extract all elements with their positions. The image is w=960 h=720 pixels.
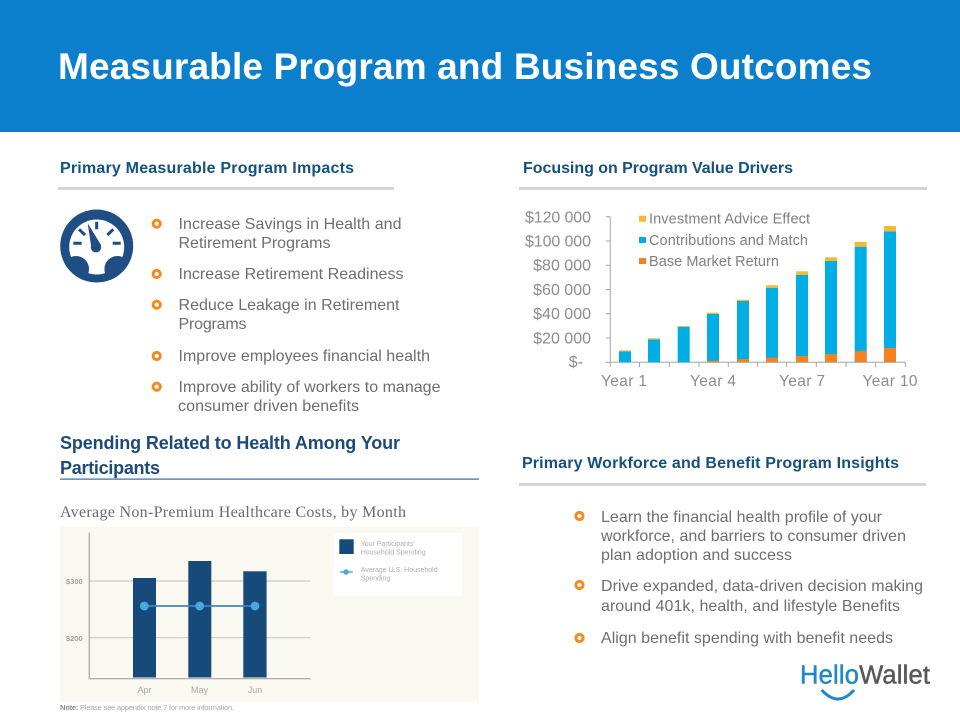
stacked bar chart: $20 000 [533, 330, 591, 348]
chart legend [639, 212, 810, 270]
legend: spending [334, 533, 462, 596]
panel: spending related to health [60, 433, 479, 712]
bullet list: program impacts: consumer driven benefits [178, 398, 359, 415]
chart: healthcare costs by month: $300 [66, 577, 83, 586]
panel: spending related to health: Participants [60, 458, 160, 478]
bullet list: program impacts: Increase Savings in Health and [178, 216, 402, 233]
chart: healthcare costs by month: $200 [66, 634, 83, 643]
bullet list: program impacts [153, 216, 441, 415]
bars: investment advice effect [619, 226, 896, 351]
stacked bar chart: Year 7 [779, 373, 825, 390]
bullet list: workforce insights: Drive expanded, data-driven decision making [601, 578, 923, 595]
bars: household spending [133, 561, 267, 678]
stacked bar chart: Year 1 [601, 373, 647, 390]
title: Measurable Program and Business Outcomes [58, 46, 872, 87]
bullet list: workforce insights: plan adoption and success [601, 547, 792, 564]
stacked bar chart [525, 210, 918, 390]
panel: primary measurable program impacts [58, 160, 441, 415]
line: average US spending [140, 602, 259, 610]
legend: spending: Average U.S. Household [361, 567, 438, 574]
bullet list: program impacts: Programs [178, 316, 246, 333]
header banner [0, 0, 960, 132]
icon: gauge [60, 210, 133, 282]
bullet list: program impacts: Reduce Leakage in Retirement [178, 297, 400, 314]
bullet list: program impacts: Improve ability of workers to manage [178, 379, 441, 396]
stacked bar chart: $60 000 [533, 282, 591, 299]
bars: contributions and match [619, 231, 896, 362]
bullet list: workforce insights [576, 509, 923, 647]
bullet list: workforce insights: workforce, and barriers to consumer driven [600, 528, 906, 545]
logo: HelloWallet: HelloWallet [800, 662, 930, 690]
stacked bar chart: $40 000 [533, 306, 591, 323]
stacked bar chart: Year 10 [862, 373, 918, 390]
stacked bar chart: $- [569, 354, 583, 371]
heading: spending related to health: Spending Related to Health Among Your [60, 433, 400, 453]
chart legend: Contributions and Match [649, 233, 808, 249]
bullet list: program impacts: Improve employees financial health [178, 348, 430, 365]
chart: healthcare costs by month: Apr [137, 685, 152, 695]
stacked bar chart: $80 000 [533, 258, 591, 274]
panel: program value drivers [519, 160, 927, 390]
chart legend: Base Market Return [649, 254, 779, 270]
bullet list: program impacts: Increase Retirement Readiness [178, 266, 404, 283]
legend: spending: Household Spending [361, 550, 426, 556]
chart: healthcare costs by month: May [191, 685, 208, 695]
heading: workforce insights: Primary Workforce and Benefit Program Insights [522, 455, 899, 472]
heading: program impacts: Primary Measurable Program Impacts [60, 160, 354, 177]
subtitle: healthcare costs: Average Non-Premium Healthcare Costs, by Month [60, 504, 406, 521]
bars: base market return [707, 348, 896, 362]
panel: workforce and benefit insights [519, 455, 926, 647]
chart: healthcare costs by month: Jun [248, 685, 262, 695]
bullet list: workforce insights: Align benefit spending with benefit needs [601, 630, 893, 647]
stacked bar chart: Year 4 [690, 373, 736, 390]
bullet list: workforce insights: around 401k, health, and lifestyle Benefits [601, 598, 900, 615]
chart: healthcare costs by month [60, 527, 479, 702]
stacked bar chart: $100 000 [525, 234, 591, 250]
legend: spending: Your Participants' [361, 541, 415, 548]
bullet list: program impacts: Retirement Programs [178, 235, 330, 252]
chart legend: Investment Advice Effect [649, 212, 810, 228]
stacked bar chart: $120 000 [525, 210, 591, 226]
bullet list: workforce insights: Learn the financial health profile of your [601, 509, 883, 526]
footnote: Note: Please see appendix note 7 for more information. [60, 703, 234, 712]
legend: spending: Spending [361, 576, 390, 582]
heading: value drivers: Focusing on Program Value Drivers [523, 160, 793, 177]
